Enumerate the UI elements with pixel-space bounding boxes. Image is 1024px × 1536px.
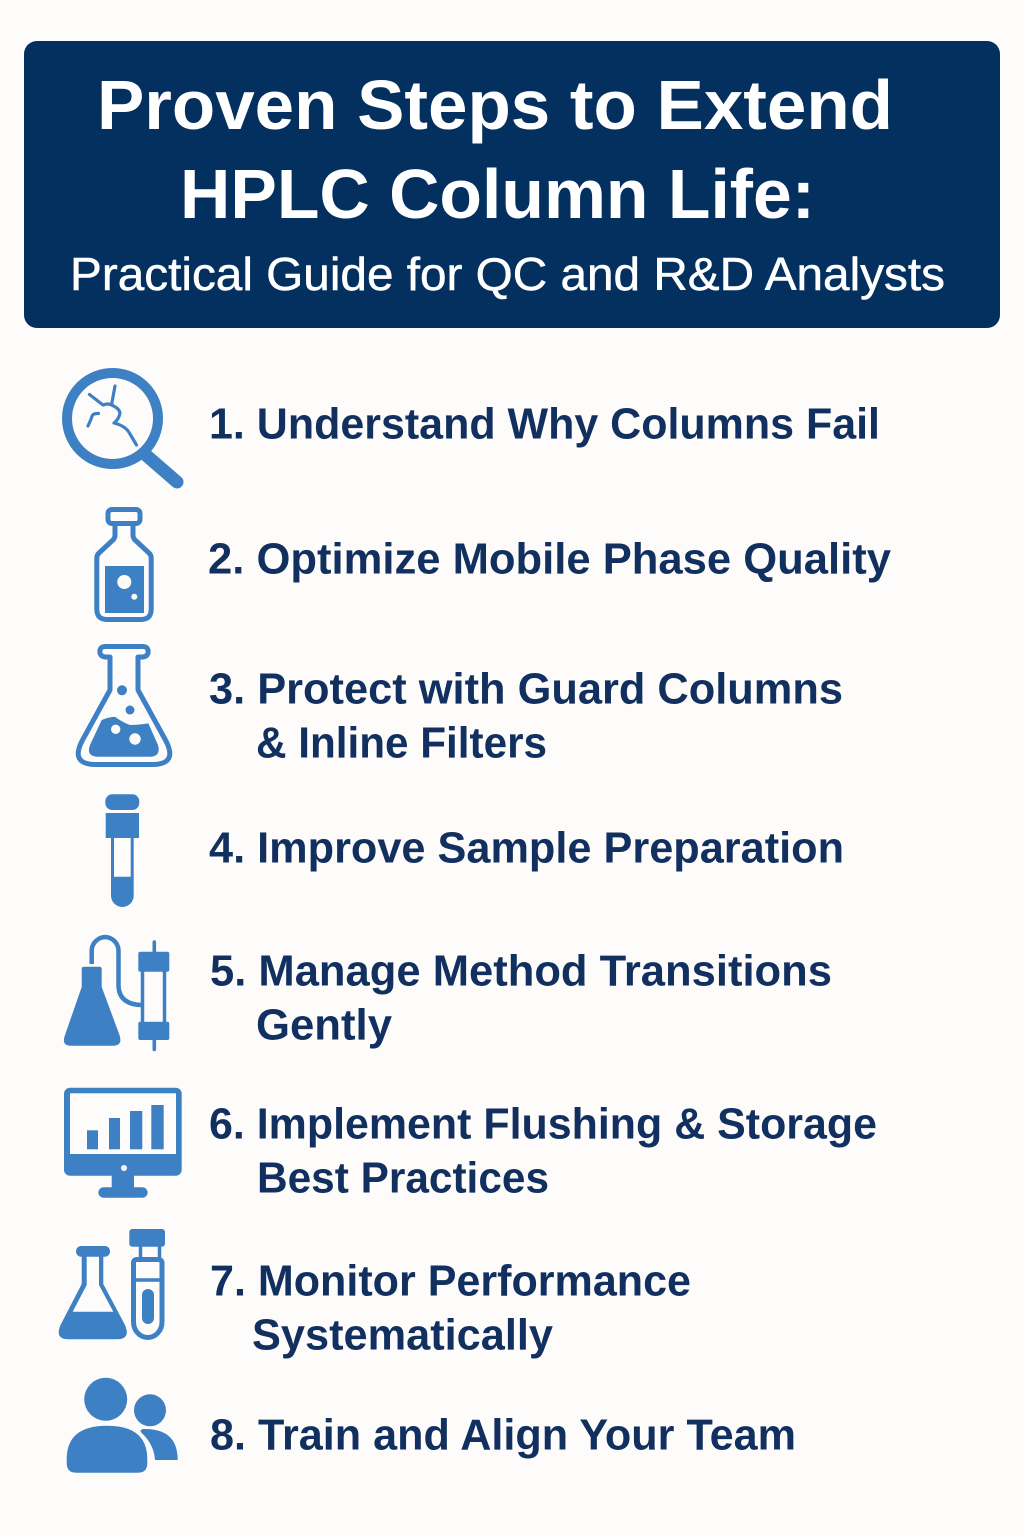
icon: flask connected to column [64,937,169,1050]
icon: flask and vial [59,1229,165,1339]
step 8: 8. Train and Align Your Team [210,1410,796,1460]
step 7: 7. Monitor Performance [210,1256,691,1306]
icon: capped test tube [105,794,139,907]
icon: monitor with bar chart [64,1088,182,1198]
step 3: & Inline Filters [256,718,547,768]
title: HPLC Column Life: [180,155,815,233]
step 5: 5. Manage Method Transitions [210,946,832,996]
icon: bottle [97,510,151,620]
header banner [24,41,1000,328]
step 5 [210,946,832,1050]
icon: erlenmeyer flask with bubbles [78,646,170,764]
step 6: 6. Implement Flushing & Storage [209,1100,877,1148]
step 3 [209,664,843,768]
step 7: Systematically [252,1310,554,1360]
step 4: 4. Improve Sample Preparation [209,824,844,872]
step 3: 3. Protect with Guard Columns [209,664,843,714]
icon: magnifying glass with crack [67,373,177,482]
step 6: Best Practices [257,1154,549,1202]
icon: team of people [67,1378,178,1473]
step 6 [209,1100,877,1202]
step 2: 2. Optimize Mobile Phase Quality [208,534,892,584]
step 1: 1. Understand Why Columns Fail [209,400,880,448]
step 7 [210,1256,691,1360]
title [97,66,893,233]
step 5: Gently [256,1000,393,1050]
subtitle: Practical Guide for QC and R&D Analysts [70,248,945,300]
title: Proven Steps to Extend [97,66,893,144]
